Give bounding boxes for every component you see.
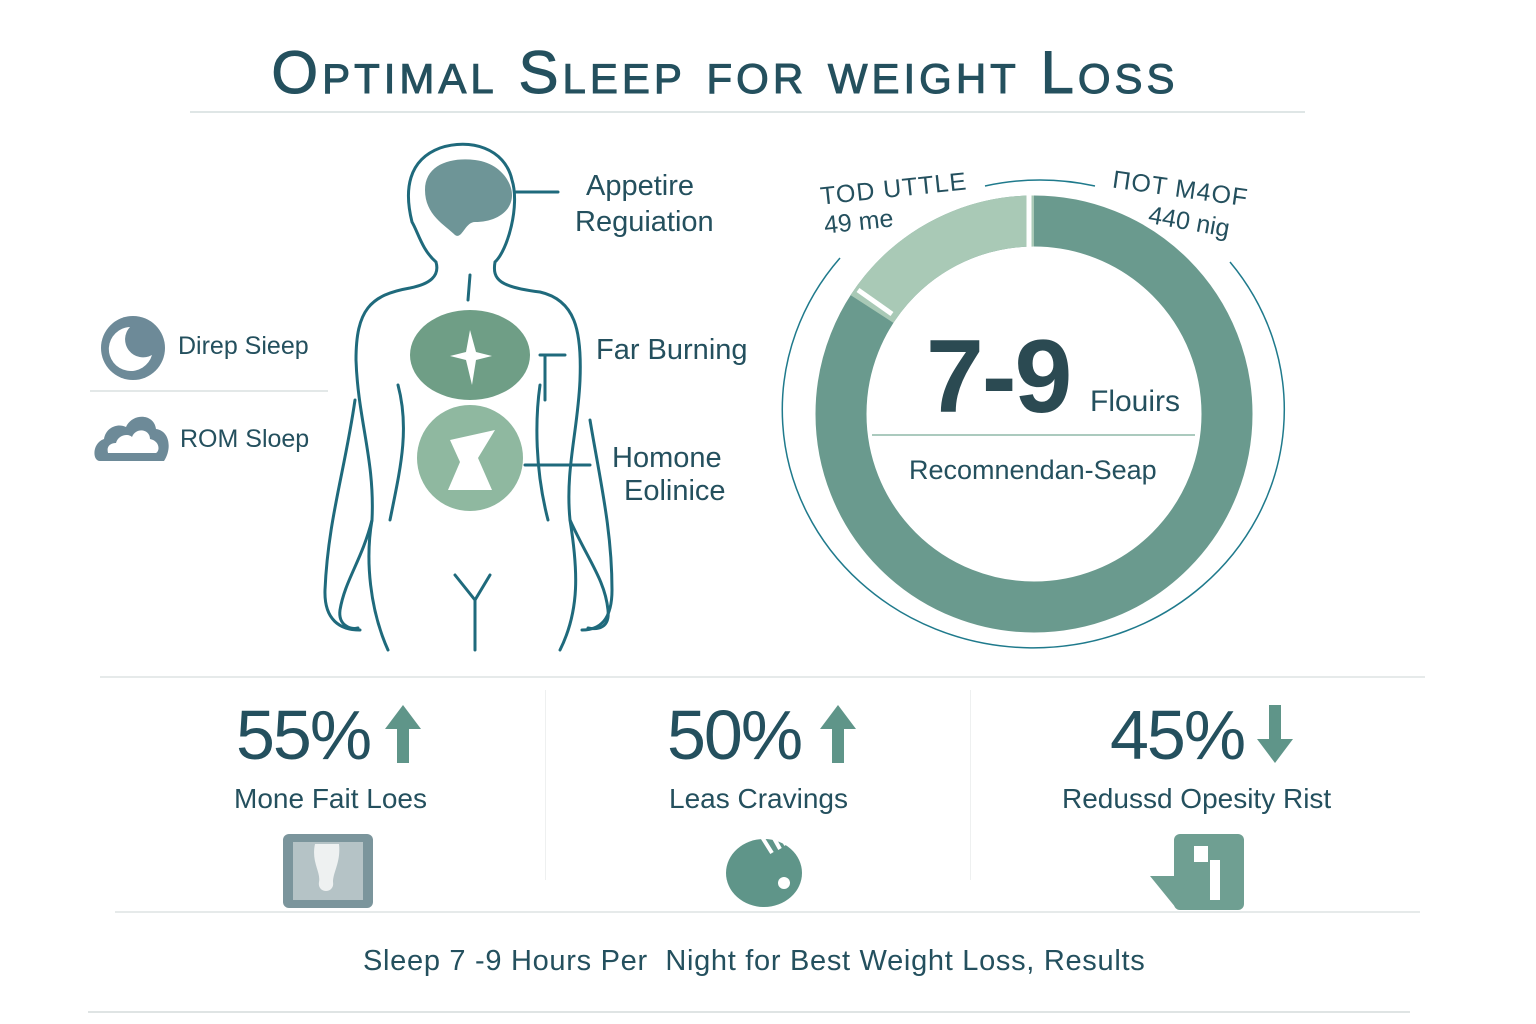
text: Flouirs <box>1090 385 1180 418</box>
stat: 55%: 55% <box>236 696 370 774</box>
donut center value: 7-9 <box>926 319 1070 435</box>
text: ПOT M4OF <box>1111 166 1250 212</box>
stat: 55%: Mone Fait Loes <box>234 783 427 814</box>
stat: 50%: 50% <box>667 696 801 774</box>
text: TOD UTTLE <box>819 167 968 211</box>
stat: 55% <box>234 696 427 908</box>
text: 49 me <box>823 204 895 240</box>
icon: food <box>726 839 802 907</box>
text: Reguiation <box>575 206 714 238</box>
legend: sleep types <box>90 316 328 461</box>
text: Eolinice <box>624 475 726 507</box>
body labels: Appetire <box>586 170 694 202</box>
footer text: Sleep 7 -9 Hours Per Night for Best Weight Loss, Results <box>363 945 1145 977</box>
stat: 45%: 45% <box>1110 696 1244 774</box>
text: Recomnendan-Seap <box>909 455 1157 485</box>
icon: scale down <box>1150 834 1244 910</box>
silhouette <box>325 144 612 650</box>
legend: sleep types: Direp Sieep <box>178 332 309 360</box>
stat: 45% <box>1062 696 1331 910</box>
text: 440 nig <box>1146 201 1232 243</box>
icon: stomach <box>417 405 523 511</box>
icon: brain <box>425 159 512 236</box>
legend: sleep types: ROM Sloep <box>180 425 309 453</box>
title: Optimal Sleep for weight Loss <box>271 39 1179 106</box>
stat: 45%: Redussd Opesity Rist <box>1062 783 1331 814</box>
text: Far Burning <box>596 334 748 366</box>
icon: scale <box>283 834 373 908</box>
stat: 50%: Leas Cravings <box>669 783 848 814</box>
icon: lungs <box>410 310 530 400</box>
icon: cloud <box>94 416 169 461</box>
icon: moon <box>101 316 165 380</box>
text: Homone <box>612 442 722 474</box>
stat: 50% <box>667 696 856 907</box>
